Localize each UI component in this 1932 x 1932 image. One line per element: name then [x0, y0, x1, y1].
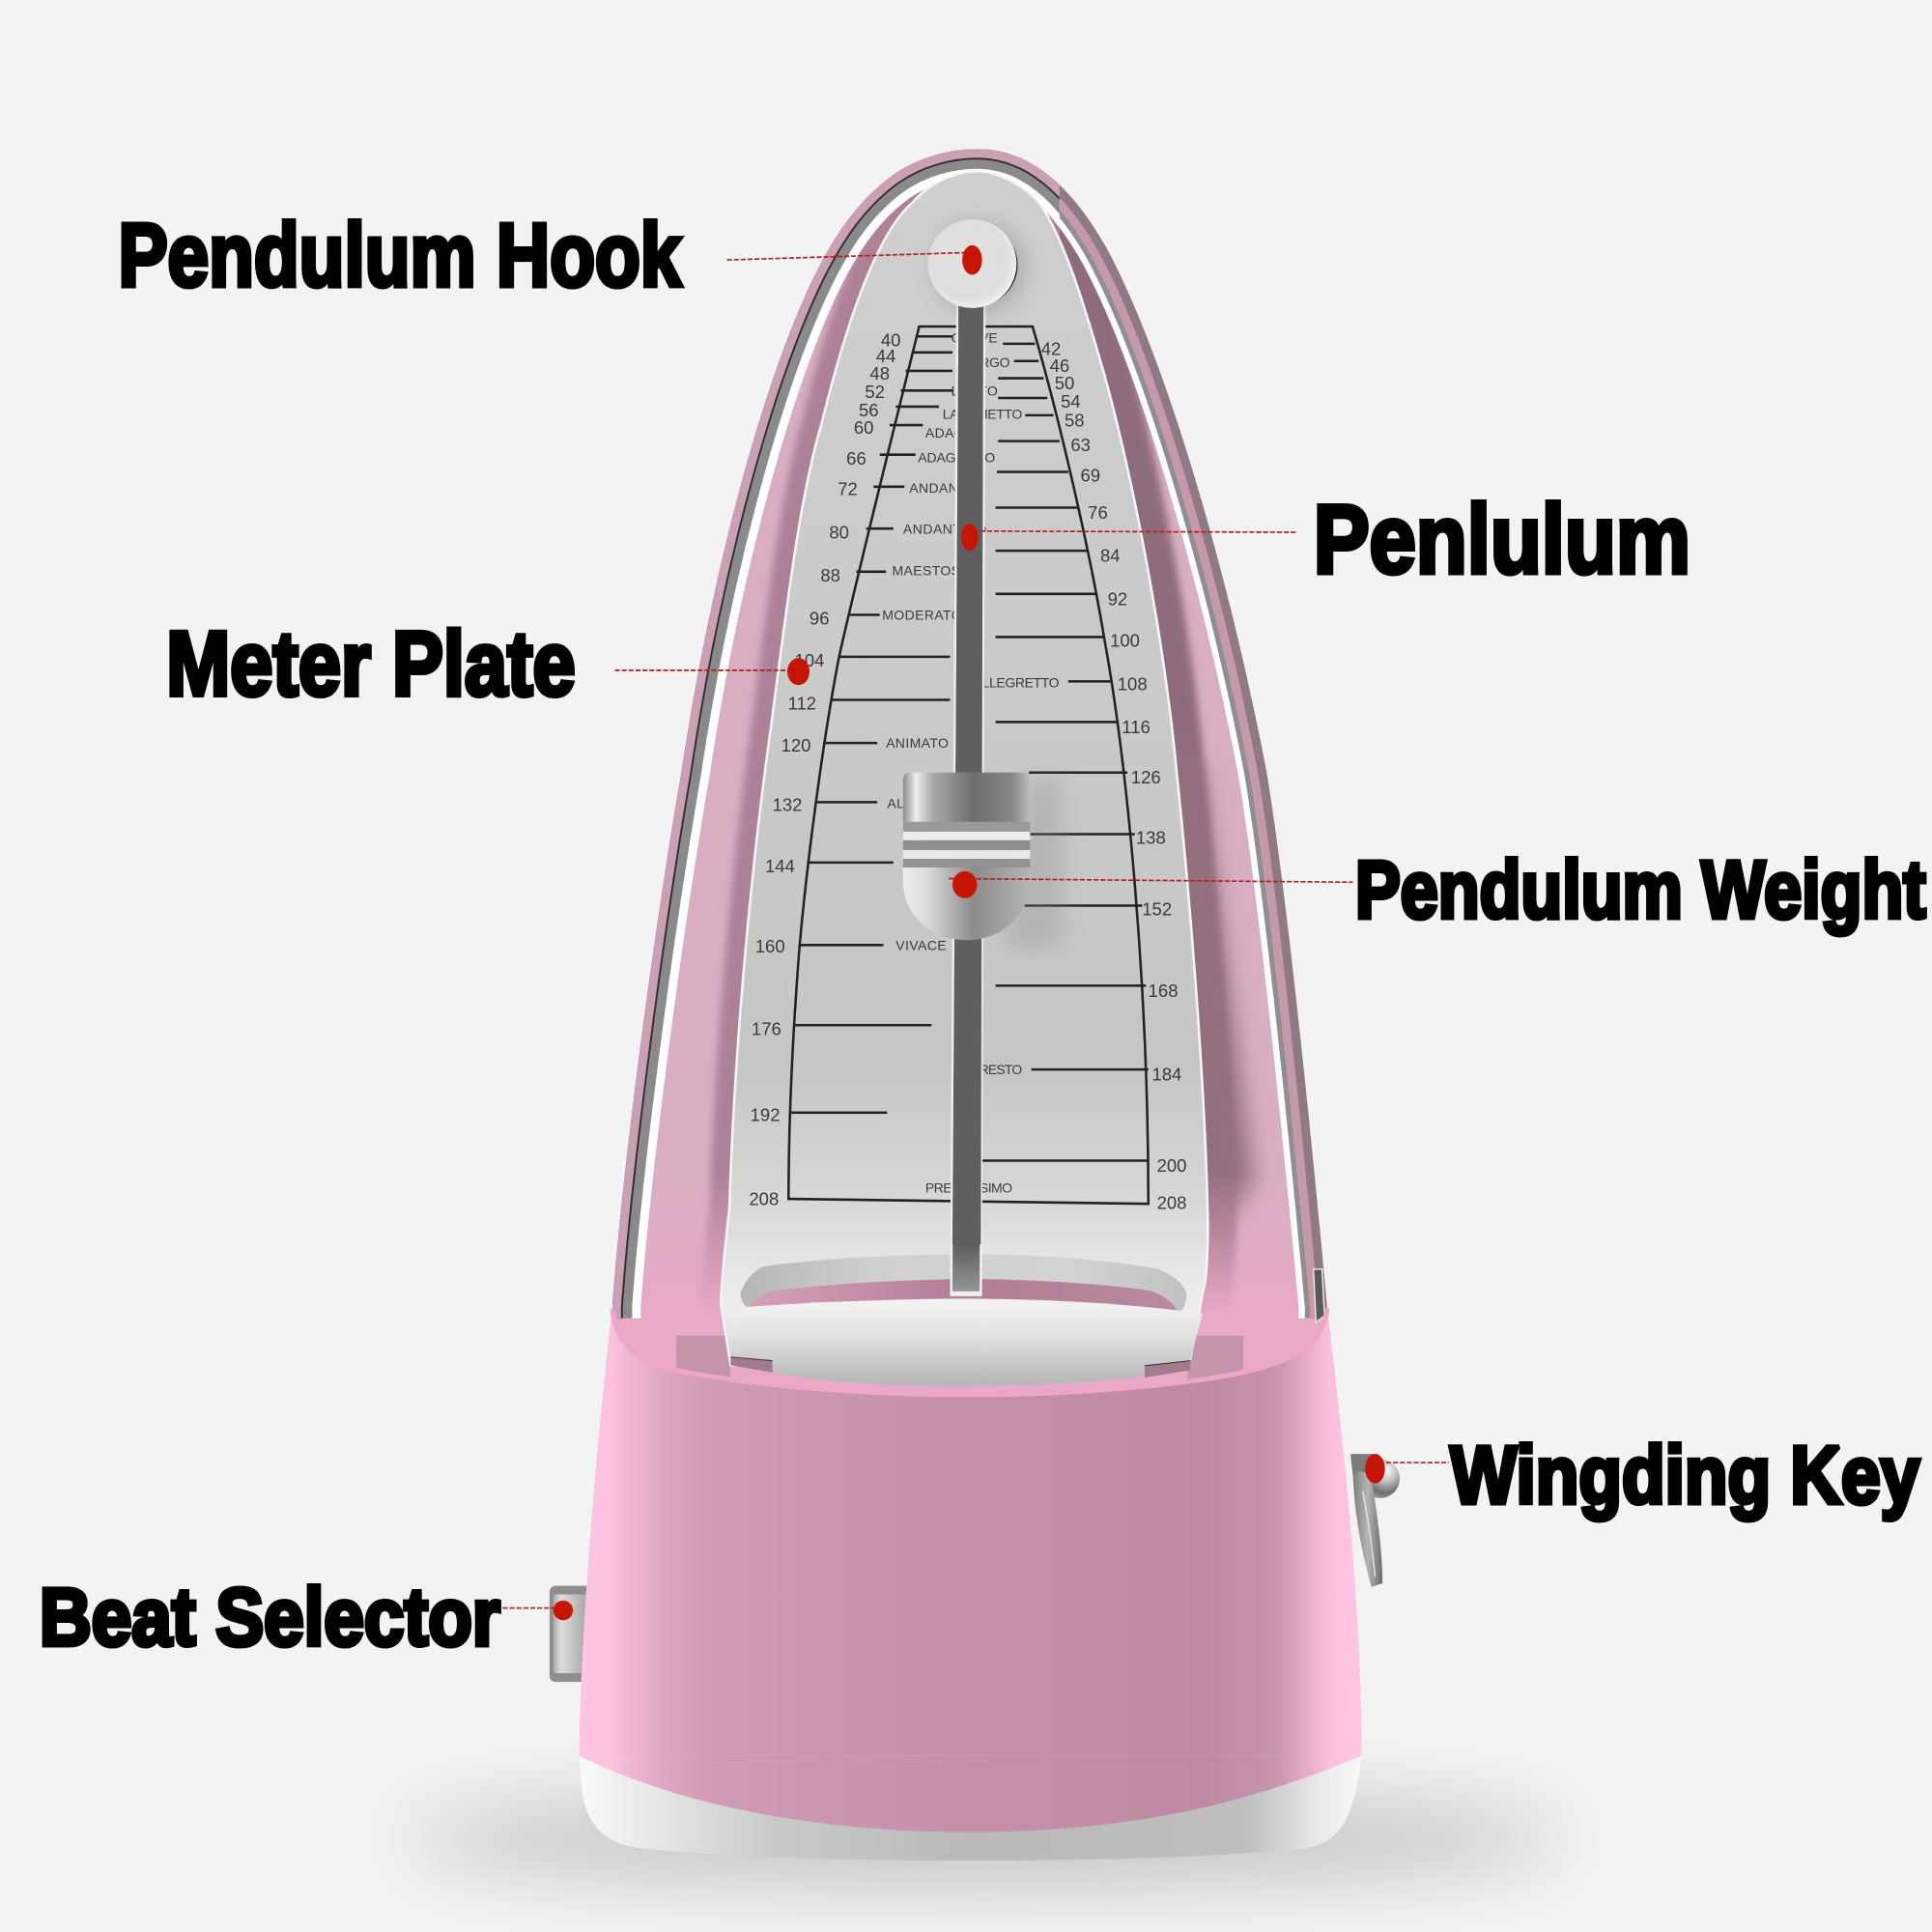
tempo names: MODERATO	[882, 608, 962, 623]
left tempo numbers: 120	[781, 735, 810, 755]
right tempo numbers	[1041, 338, 1186, 1212]
right tempo numbers: 200	[1157, 1155, 1186, 1176]
right tempo numbers: 46	[1050, 355, 1069, 376]
right tempo numbers: 208	[1157, 1192, 1186, 1212]
bottom pink fade	[616, 1184, 1322, 1393]
tempo names	[882, 330, 1060, 1196]
floor shadow	[407, 1792, 1565, 1886]
tempo names: ANDANTE	[909, 480, 977, 496]
left tempo numbers: 96	[810, 609, 829, 629]
right tempo numbers: 184	[1151, 1065, 1181, 1085]
callout: pendulum: Penlulum	[1314, 486, 1690, 594]
left tempo numbers: 176	[752, 1018, 781, 1038]
tempo names: ADAGIETTO	[918, 449, 996, 465]
callout: pendulum hook: Pendulum Hook	[118, 205, 682, 305]
right tempo numbers: 69	[1081, 466, 1100, 486]
left tempo numbers: 44	[876, 346, 895, 366]
right tempo numbers: 92	[1108, 588, 1127, 609]
plate slot	[741, 1254, 1186, 1314]
left tempo numbers: 112	[788, 694, 816, 714]
callout: pendulum weight	[949, 844, 1926, 935]
right tempo numbers: 100	[1110, 631, 1140, 651]
left tempo numbers: 80	[829, 522, 849, 542]
right tempo numbers: 116	[1122, 717, 1151, 737]
right tempo numbers: 138	[1136, 828, 1166, 848]
lower body	[579, 1306, 1361, 1833]
pendulum hook	[927, 219, 1024, 312]
left tempo numbers: 88	[820, 565, 840, 585]
pendulum weight	[903, 773, 1062, 949]
tempo names: LARGHETTO	[943, 407, 1023, 422]
left tempo numbers: 56	[859, 400, 879, 420]
left mauve reflection	[703, 189, 1060, 1289]
right tempo numbers: 50	[1055, 373, 1074, 393]
tempo names: ANDANTINO	[903, 521, 987, 536]
right tempo numbers: 84	[1100, 546, 1121, 566]
left tempo numbers: 104	[795, 650, 824, 670]
left tempo numbers: 72	[838, 479, 858, 499]
meter plate	[721, 171, 1208, 1365]
plate tongue	[722, 1298, 1203, 1386]
tempo names: VIVACE	[895, 937, 947, 952]
pendulum rod	[950, 305, 985, 1296]
tempo names: PRESTO	[971, 1062, 1023, 1077]
left edge bands	[612, 149, 1060, 1319]
tempo names: LENTO	[952, 383, 998, 398]
right tempo numbers: 63	[1070, 435, 1091, 455]
icon: winding key	[1350, 1454, 1400, 1587]
right tempo numbers: 108	[1118, 673, 1148, 694]
right mauve reflection	[1060, 228, 1265, 1298]
left tempo numbers: 48	[869, 363, 890, 384]
left tempo numbers: 160	[755, 936, 785, 956]
tempo names: ALLEGRO	[887, 796, 953, 811]
left tempo numbers: 208	[749, 1188, 779, 1208]
left tempo numbers: 66	[846, 448, 867, 469]
right tempo numbers: 42	[1041, 338, 1061, 358]
right tempo numbers: 58	[1065, 410, 1085, 430]
left tempo numbers: 52	[865, 382, 885, 402]
tempo names: LARGO	[963, 355, 1010, 370]
right tempo numbers: 168	[1149, 980, 1179, 1001]
right tempo numbers: 76	[1088, 502, 1108, 523]
rear chrome clip	[1314, 1269, 1324, 1322]
tempo names: ANIMATO	[886, 735, 949, 751]
right edge bands	[1059, 185, 1327, 1319]
callout: meter plate: Meter Plate	[166, 613, 576, 715]
cap shading	[676, 1335, 1243, 1379]
icon: beat selector	[550, 1586, 591, 1682]
tempo names: PRESTISSIMO	[925, 1180, 1012, 1196]
left tempo numbers: 144	[765, 856, 795, 876]
left tempo numbers: 40	[881, 329, 900, 350]
tempo names: ALLEGRETTO	[974, 675, 1060, 691]
white base	[579, 1756, 1361, 1861]
left tempo numbers: 60	[854, 417, 873, 438]
left tempo numbers	[749, 329, 900, 1208]
tempo names: MAESTOSO	[892, 563, 972, 579]
tempo names: GRAVE	[952, 330, 998, 346]
right tempo numbers: 54	[1061, 391, 1081, 412]
left tempo numbers: 192	[751, 1105, 781, 1125]
right tempo numbers: 126	[1131, 767, 1161, 787]
right tempo numbers: 152	[1142, 899, 1172, 920]
upper glass shell	[604, 135, 1343, 1405]
callout: beat selector: Beat Selector	[40, 1572, 500, 1662]
callout: pendulum	[961, 486, 1690, 594]
scale ladder lines	[788, 327, 1149, 1204]
left tempo numbers: 132	[773, 794, 802, 814]
tempo names: ADAGIO	[925, 425, 980, 440]
